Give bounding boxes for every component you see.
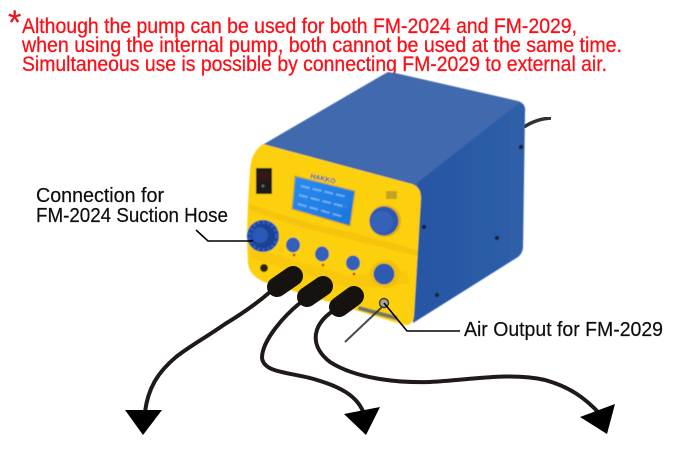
arrowhead: left <box>125 410 162 435</box>
model badge <box>386 191 397 199</box>
connector: right <box>339 296 354 307</box>
LCD screen <box>292 176 355 226</box>
note line 2: when using the internal pump, both cannot be used at the same time. <box>21 34 622 57</box>
connector: middle <box>307 286 323 297</box>
arrowhead: right <box>580 404 615 434</box>
blue top panel <box>262 72 525 190</box>
note line 3: Simultaneous use is possible by connecting FM-2029 to external air. <box>22 53 607 76</box>
left cable <box>145 292 270 412</box>
thin air tube <box>345 306 383 342</box>
label: air output: Air Output for FM-2029 <box>464 319 663 341</box>
middle cable <box>262 303 364 414</box>
right cable <box>316 308 600 414</box>
power switch <box>256 168 272 194</box>
cables and arrows <box>145 292 600 414</box>
screen readout bars <box>298 186 347 217</box>
air output nozzle <box>380 298 388 308</box>
indicator lights <box>293 254 355 275</box>
small blue knob <box>370 260 400 288</box>
connector: left <box>277 276 293 287</box>
yellow front panel <box>247 144 421 325</box>
brand logo: HAKKO <box>310 173 337 186</box>
soldering station unit <box>247 72 525 325</box>
front label text <box>358 306 398 320</box>
leader line: suction hose <box>196 230 253 241</box>
note line 1: Although the pump can be used for both FM-2024 and FM-2029, <box>22 15 577 38</box>
rear power cord <box>524 118 551 127</box>
headphone jack <box>260 264 268 272</box>
large blue knob <box>369 205 401 237</box>
arrowhead: middle <box>344 407 380 435</box>
lower panel recess <box>250 246 410 288</box>
front panel shading <box>249 204 418 256</box>
blue side panel <box>413 103 525 323</box>
asterisk: * <box>8 4 21 42</box>
label: suction hose connection: Connection for <box>36 185 164 207</box>
note: pump usage warning <box>8 4 622 76</box>
label: suction hose connection: FM-2024 Suction Hose <box>36 205 228 227</box>
blue ridged rotary knob <box>247 220 279 252</box>
function buttons <box>286 238 360 270</box>
label: suction hose connection <box>36 185 228 227</box>
side panel screws <box>422 145 523 297</box>
leader line: air output <box>384 303 460 331</box>
